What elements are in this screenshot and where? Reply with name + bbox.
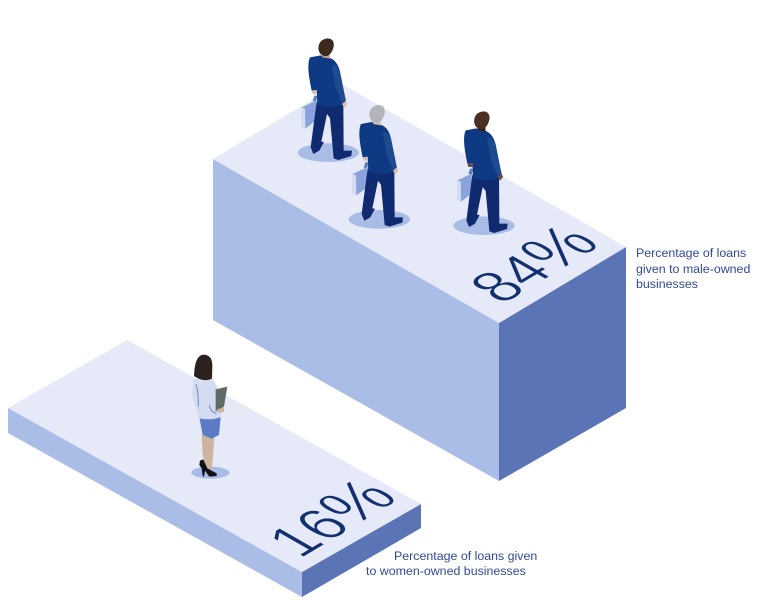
label: male-owned businesses: given to male-owned bbox=[636, 262, 750, 276]
figure: woman with folder, back bbox=[191, 355, 229, 479]
label: women-owned businesses: Percentage of loans given bbox=[394, 549, 537, 563]
figure: dark-skinned man with briefcase, back bbox=[453, 111, 515, 235]
label: women-owned businesses: to women-owned businesses bbox=[366, 564, 526, 578]
block: women-owned 16% bbox=[8, 340, 421, 597]
stat: 16%: 16% bbox=[246, 468, 413, 566]
figure: grey-haired man with briefcase, back bbox=[349, 105, 410, 229]
block: male-owned 84% bbox=[213, 83, 626, 481]
label: male-owned businesses: Percentage of loans bbox=[636, 246, 746, 260]
label: male-owned businesses: businesses bbox=[636, 277, 698, 291]
stat: 84%: 84% bbox=[448, 214, 615, 312]
figure: man with briefcase, back bbox=[298, 38, 359, 162]
